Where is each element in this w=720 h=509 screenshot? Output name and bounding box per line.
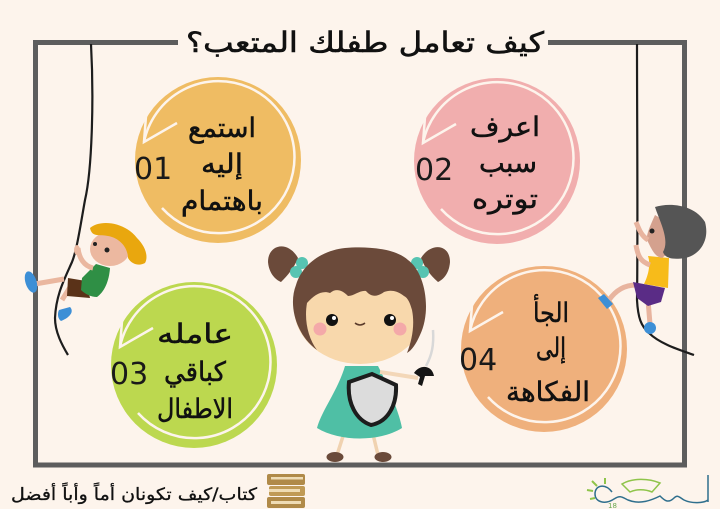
icon: boy climbing right [598,205,706,334]
number: 03: 03 [110,357,148,392]
eyes and mouth [326,314,396,326]
text: step 01: باهتمام [181,186,263,217]
text: step 04: الفكاهة [506,377,590,408]
icon: right rope [637,44,694,355]
text: step 03: الاطفال [157,394,233,425]
text: step 04 [506,293,590,408]
text: step 02 [470,112,540,215]
arrow head: step 04 [470,305,503,331]
logo [587,475,708,509]
source text: كتاب/كيف تكونان أماً وأباً أفضل [11,481,258,505]
dress [317,366,402,438]
sword [414,330,434,386]
text: step 03 [157,319,233,425]
legs and shoes [326,430,392,462]
panel: step 03 [110,282,277,448]
number: 01: 01 [134,152,172,187]
arm [380,372,418,378]
text: step 02: سبب [479,148,537,179]
icon: boy climbing left [22,223,146,321]
text: step 03: كباقي [164,357,226,388]
arrow head: step 02 [423,117,456,143]
text: step 01: إليه [201,149,243,180]
text: step 02: اعرف [470,112,540,143]
hair ties [290,257,429,278]
number: 04: 04 [459,343,497,378]
title: كيف تعامل طفلك المتعب؟ [186,26,545,59]
text: step 02: توتره [472,184,538,215]
hair [293,247,426,353]
text: step 01 [181,113,263,217]
panel: step 01 [134,77,301,243]
arrow head: step 03 [120,321,153,347]
head [294,252,426,364]
icon: girl with shield and sword [268,246,450,462]
panel: step 02 [414,78,580,244]
arrow head: step 01 [144,116,177,142]
number: 02: 02 [415,153,453,188]
icon: left rope [55,44,92,355]
text: step 04: إلى [536,333,566,364]
panel: step 04 [459,266,627,432]
cheeks [314,322,326,336]
text: step 01: استمع [188,113,256,144]
shield [349,374,396,425]
pigtails [268,246,298,282]
frame [36,42,684,465]
text: step 04: الجأ [533,293,569,329]
icon: books [267,474,305,508]
text: step 03: عامله [157,319,233,350]
